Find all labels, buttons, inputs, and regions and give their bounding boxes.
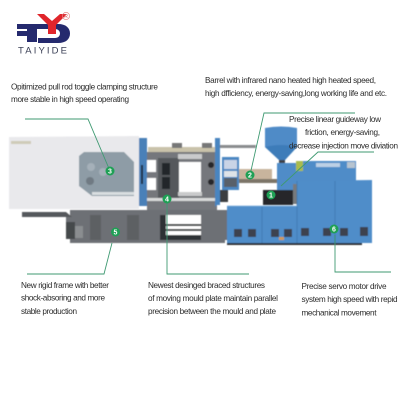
badge 2 — [246, 170, 254, 180]
text: linear guideway: friction, energy-saving, — [305, 128, 380, 137]
text: barrel: Barrel with infrared nano heated high heated speed, — [205, 76, 376, 85]
text: rigid frame: shock-absoring and more — [21, 294, 105, 302]
text: servo motor: Precise servo motor drive — [302, 282, 387, 291]
nozzle block — [263, 190, 293, 205]
text: rigid frame: stable production — [21, 307, 77, 316]
text: braced structures — [148, 281, 278, 316]
text: braced structures: Newest desinged braced structures — [148, 281, 265, 290]
badge 5: 5 — [114, 230, 118, 236]
text: barrel — [205, 76, 387, 98]
text: rigid frame — [21, 281, 109, 316]
text: servo motor — [302, 282, 398, 318]
blue guard strip — [139, 138, 147, 206]
logo: TAIYIDE — [17, 12, 70, 56]
text: clamping structure: Opitimized pull rod toggle clamping structure — [11, 82, 158, 92]
text: linear guideway: decrease injection move diviation — [289, 142, 398, 150]
text: linear guideway: Precise linear guideway low — [289, 115, 381, 124]
text: servo motor: mechanical movement — [302, 308, 377, 318]
badge 1 — [266, 190, 276, 200]
text: braced structures: precision between the mould and plate — [148, 307, 276, 316]
machine: injection moulding machine — [9, 126, 372, 245]
machine base frame — [66, 210, 228, 243]
hopper — [265, 126, 297, 160]
badge 1: 1 — [269, 192, 273, 200]
badge 5 — [111, 228, 120, 236]
leader line 2 — [250, 113, 355, 175]
badge 6 — [330, 224, 338, 234]
leader line 6 — [335, 235, 391, 272]
badge 6: 6 — [332, 226, 336, 234]
safety guard — [9, 136, 139, 209]
control panel — [222, 157, 239, 190]
clamping frame — [148, 147, 218, 152]
second blue strip — [215, 138, 220, 207]
badge 2: 2 — [248, 172, 252, 180]
text: braced structures: of moving mould plate maintain parallel — [148, 294, 278, 303]
text: clamping structure: more stable in high speed operating — [11, 95, 129, 104]
badge 3: 3 — [108, 168, 112, 176]
text: rigid frame: New rigid frame with better — [21, 281, 109, 290]
leader line 1 — [281, 152, 374, 186]
logo: TAIYIDE: TAIYIDE — [18, 46, 67, 56]
blue base cabinet — [227, 180, 372, 243]
leader line 5 — [27, 243, 112, 274]
injection unit — [277, 161, 356, 190]
leader line 3 — [25, 119, 110, 171]
text: linear guideway — [289, 115, 398, 150]
barrel — [239, 169, 272, 179]
logo: TAIYIDE: R — [64, 14, 68, 20]
badge 4: 4 — [165, 196, 169, 204]
badge 4 — [162, 194, 172, 204]
leader line 4 — [167, 199, 249, 274]
text: servo motor: system high speed with repid — [302, 295, 398, 304]
text: clamping structure — [11, 82, 158, 104]
badge 3 — [106, 166, 114, 176]
text: barrel: high dfficiency, energy-saving,long working life and etc. — [205, 89, 387, 98]
